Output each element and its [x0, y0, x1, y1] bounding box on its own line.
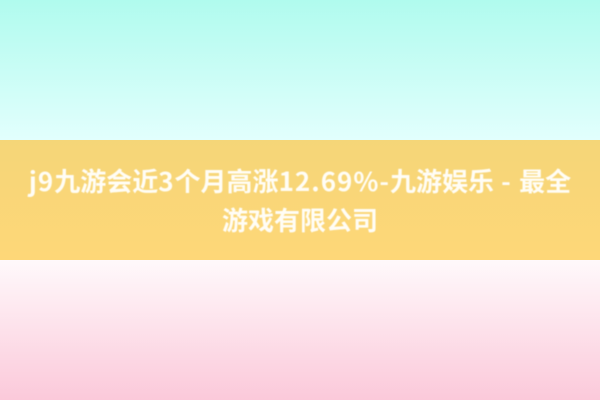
panel: bottom pink gradient: [0, 260, 600, 400]
panel: top aqua gradient: [0, 0, 600, 140]
title: [27, 162, 571, 238]
panel: yellow title band: [0, 140, 600, 260]
title: j9九游会近3个月高涨12.69%-九游娱乐 - 最全: [29, 162, 571, 199]
title: 游戏有限公司: [222, 201, 378, 238]
